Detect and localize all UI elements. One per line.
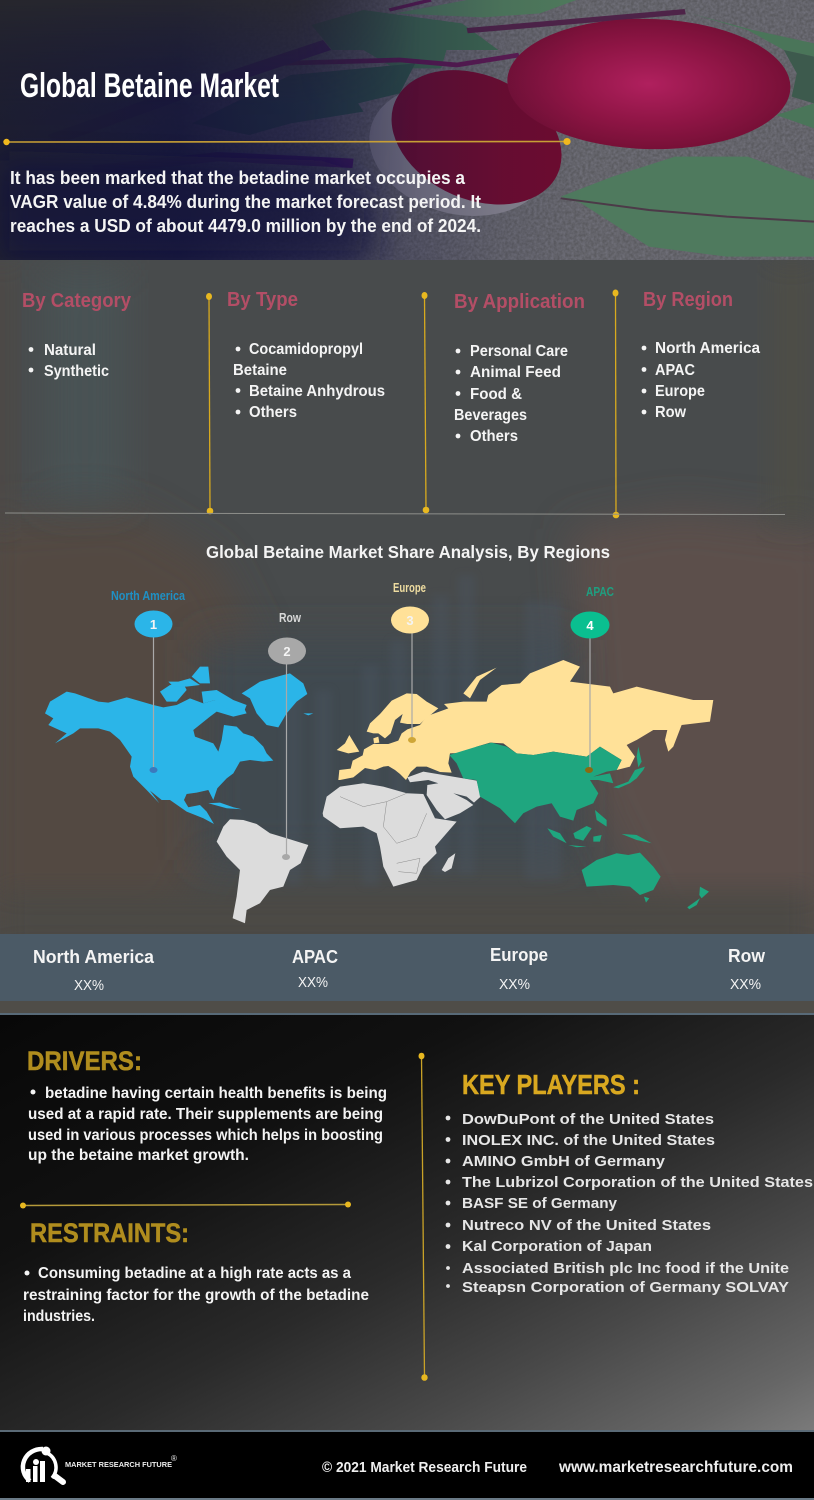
map pin 1: north america — [111, 588, 186, 773]
heading: by region: By Region — [643, 289, 733, 311]
list: application items: Food & — [470, 386, 522, 403]
list: application items: Others — [470, 428, 518, 445]
heading: drivers: DRIVERS: — [27, 1046, 142, 1076]
list: key players: AMINO GmbH of Germany — [462, 1153, 666, 1170]
region: apac — [449, 743, 709, 909]
list: type items: Others — [249, 404, 297, 421]
text: restraints body: restraining factor for the growth of the betadine — [23, 1287, 369, 1304]
text: restraints body: Consuming betadine at a high rate acts as a — [38, 1265, 351, 1282]
list: region items: Europe — [655, 383, 705, 400]
heading: by application: By Application — [454, 291, 585, 313]
intro text: VAGR value of 4.84% during the market forecast period. It — [10, 192, 481, 212]
list: type items: Betaine Anhydrous — [249, 383, 385, 400]
list: region items: Row — [655, 404, 687, 421]
background: hands and bar chart photo — [0, 260, 814, 950]
panel: market segments — [22, 289, 760, 518]
intro text: It has been marked that the betadine market occupies a — [10, 168, 466, 188]
list: region items — [642, 340, 760, 421]
stat: apac: APAC — [292, 947, 338, 967]
heading: key players: KEY PLAYERS : — [462, 1069, 640, 1100]
list: region items: APAC — [655, 362, 695, 379]
panel: drivers, restraints and key players — [0, 1015, 814, 1430]
logo: market research future — [23, 1446, 177, 1482]
map pin 1: north america: North America — [111, 588, 186, 603]
region: north america — [45, 667, 313, 824]
intro text — [10, 168, 481, 236]
list: region items: North America — [655, 340, 760, 357]
column divider 3 — [612, 290, 619, 518]
heading: by type: By Type — [227, 289, 298, 311]
list: key players: Nutreco NV of the United States — [462, 1217, 711, 1234]
divider: vertical gold rule — [418, 1053, 428, 1381]
region: south america — [217, 819, 308, 923]
list: key players: Kal Corporation of Japan — [462, 1238, 652, 1255]
map pin 1: north america: 1 — [150, 617, 157, 632]
list: application items: Personal Care — [470, 343, 568, 360]
heading: restraints: RESTRAINTS: — [30, 1218, 189, 1248]
text: drivers body: up the betaine market growth. — [28, 1147, 249, 1164]
stat: europe: Europe — [490, 945, 548, 965]
text: drivers body: betadine having certain health benefits is being — [45, 1085, 387, 1102]
stat: north america: XX% — [74, 977, 104, 994]
column divider 1 — [206, 293, 213, 514]
map pin 3: europe — [391, 580, 429, 743]
list: category items: Synthetic — [44, 363, 109, 380]
world map — [45, 660, 713, 923]
region: europe and russia — [337, 660, 713, 780]
stat: apac — [292, 947, 338, 991]
list: application items — [454, 343, 568, 445]
list: application items: Beverages — [454, 407, 527, 424]
title: Global Betaine Market — [20, 67, 279, 105]
heading: by category: By Category — [22, 290, 132, 312]
map pin 3: europe: 3 — [406, 613, 414, 628]
list: key players — [446, 1111, 813, 1296]
list: application items: Animal Feed — [470, 364, 561, 381]
hero panel: beetroot photo — [0, 0, 814, 260]
divider: restraints rule — [20, 1202, 351, 1208]
text: restraints body — [23, 1265, 369, 1325]
list: key players: BASF SE of Germany — [462, 1195, 618, 1212]
stat: row: Row — [728, 946, 766, 966]
map pin 4: apac: 4 — [586, 618, 594, 633]
column divider 2 — [422, 292, 429, 513]
map pin 4: apac — [570, 584, 614, 773]
stat: row: XX% — [730, 976, 761, 993]
logo: market research future: ® — [171, 1454, 177, 1463]
stat: north america — [33, 947, 155, 994]
stat: row — [728, 946, 766, 993]
list: type items: Cocamidopropyl — [249, 341, 363, 358]
text: drivers body: used at a rapid rate. Their supplements are being — [28, 1106, 383, 1123]
gold divider with end dots — [3, 138, 571, 145]
list: key players: Associated British plc Inc food if the Unite — [462, 1260, 789, 1277]
stat: apac: XX% — [298, 974, 328, 991]
list: key players: Steapsn Corporation of Germany SOLVAY — [462, 1279, 789, 1296]
map: eastern hemisphere — [323, 660, 713, 909]
list: key players: DowDuPont of the United States — [462, 1111, 714, 1128]
footer bar — [0, 1430, 814, 1500]
map: americas — [45, 667, 313, 923]
region: row africa and middle east — [323, 772, 481, 887]
map pin 2: row — [268, 610, 306, 860]
photo: whole sliced beet — [507, 18, 790, 150]
list: key players: INOLEX INC. of the United States — [462, 1132, 715, 1149]
photo: leaves and stems — [217, 0, 814, 256]
copyright: © 2021 Market Research Future — [322, 1459, 527, 1476]
panel: regional share strip — [0, 934, 814, 1015]
list: key players: The Lubrizol Corporation of the United States — [462, 1174, 813, 1191]
website: www.marketresearchfuture.com — [558, 1459, 793, 1476]
text: restraints body: industries. — [23, 1308, 95, 1325]
map pin 2: row: 2 — [283, 644, 291, 659]
heading: map section title: Global Betaine Market Share Analysis, By Regions — [206, 542, 610, 562]
list: type items — [233, 341, 385, 421]
list: type items: Betaine — [233, 362, 287, 379]
map pin 4: apac: APAC — [586, 584, 614, 599]
map pin 3: europe: Europe — [393, 580, 426, 595]
list: category items: Natural — [44, 342, 96, 359]
text: drivers body: used in various processes which helps in boosting — [28, 1127, 383, 1144]
map pin 2: row: Row — [279, 610, 302, 625]
intro text: reaches a USD of about 4479.0 million by the end of 2024. — [10, 216, 481, 236]
stat: europe — [490, 945, 548, 993]
stat: europe: XX% — [499, 976, 530, 993]
photo: cut half beet — [370, 70, 562, 216]
text: drivers body — [28, 1085, 387, 1164]
list: category items — [29, 342, 109, 380]
stat: north america: North America — [33, 947, 155, 967]
logo: market research future: MARKET RESEARCH FUTURE — [65, 1462, 172, 1469]
